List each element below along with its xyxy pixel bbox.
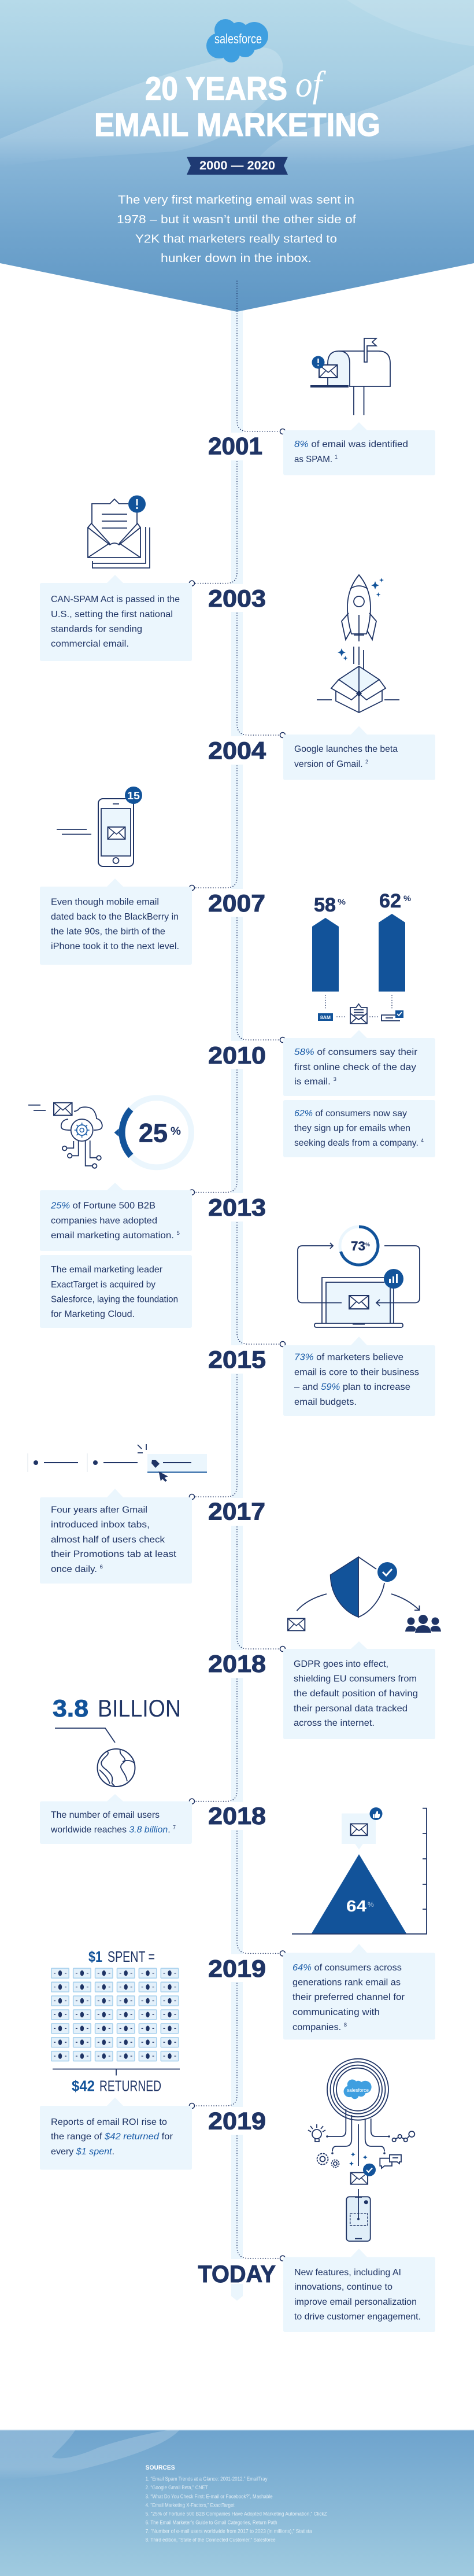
- callout 2001: [283, 422, 435, 475]
- callout 2018 users: [40, 1794, 192, 1844]
- connector 2001: [237, 281, 286, 434]
- stat: 3.8 billion with globe: [53, 1695, 181, 1787]
- intro text: [117, 193, 356, 265]
- callout 2018 GDPR: [283, 1641, 435, 1739]
- callout 2018 users: worldwide reaches 3.8 billion. 7: [50, 1824, 176, 1835]
- callout 2010 second: [283, 1100, 435, 1157]
- bar chart: 58% and 62%: 58: [314, 894, 336, 916]
- title: 20 YEARS: [145, 71, 287, 108]
- logo: salesforce cloud: [206, 19, 268, 62]
- callout 2019 preference: [283, 1944, 435, 2039]
- donut 25%: %: [171, 1125, 181, 1138]
- stat: 3.8 billion with globe: 3.8: [53, 1695, 88, 1722]
- callout 2019 ROI: Reports of email ROI rise to: [51, 2117, 167, 2127]
- callout today: New features, including AI: [294, 2268, 401, 2278]
- title: [94, 64, 380, 143]
- intro text: The very first marketing email was sent in: [118, 193, 354, 206]
- callout 2013: [40, 1183, 192, 1251]
- date ribbon: [187, 157, 288, 175]
- bar chart: 58% and 62%: 8AM: [320, 1015, 331, 1020]
- callout 2010: 58% of consumers say their: [294, 1047, 418, 1057]
- title: of: [295, 64, 327, 105]
- callout 2003: commercial email.: [51, 639, 129, 649]
- chart: $1 spent bills grid: [51, 1948, 180, 2095]
- logo: salesforce cloud: salesforce: [214, 31, 262, 46]
- year today: TODAY: [198, 2260, 276, 2287]
- intro text: hunker down in the inbox.: [161, 252, 312, 265]
- callout 2007: iPhone took it to the next level.: [51, 942, 179, 951]
- callout 2001: as SPAM. 1: [294, 454, 338, 464]
- callout 2013 second: The email marketing leader: [51, 1265, 163, 1275]
- callout today: improve email personalization: [294, 2297, 417, 2307]
- sources list: 7. “Number of e-mail users worldwide from 2017 to 2023 (in millions),” Statista: [146, 2528, 312, 2534]
- callout 2013 second: for Marketing Cloud.: [51, 1309, 135, 1319]
- callout 2010: is email. 3: [294, 1076, 336, 1087]
- callout 2018 GDPR: the default position of having: [294, 1689, 418, 1699]
- year 2004: 2004: [208, 737, 266, 764]
- date ribbon: 2000 — 2020: [199, 159, 275, 172]
- icon: GDPR shield: [288, 1557, 441, 1633]
- sources list: 2. “Google Gmail Beta,” CNET: [146, 2485, 208, 2490]
- donut 25%: [114, 1098, 191, 1167]
- callout 2019 preference: 64% of consumers across: [292, 1963, 402, 1973]
- sources list: 4. “Email Marketing X-Factors,” ExactTarget: [146, 2502, 235, 2508]
- sources list: [146, 2464, 327, 2542]
- icon: mailbox with alert envelope: [310, 338, 390, 415]
- callout 2017: once daily. 6: [51, 1564, 103, 1574]
- callout 2019 ROI: [40, 2097, 192, 2170]
- year 2003: 2003: [208, 585, 266, 612]
- intro text: Y2K that marketers really started to: [135, 232, 337, 245]
- callout 2004: Google launches the beta: [294, 744, 398, 754]
- icon: phone with new mail badge: 15: [127, 790, 140, 802]
- year 2017: 2017: [208, 1498, 265, 1525]
- callout 2015: [283, 1337, 435, 1416]
- chart: $1 spent bills grid: RETURNED: [99, 2077, 161, 2095]
- connector 2003: [190, 462, 237, 586]
- donut 25%: 25: [139, 1119, 168, 1147]
- icon: inbox tabs and cursor: [28, 1444, 207, 1482]
- year 2007: 2007: [208, 890, 265, 917]
- sources list: 8. Third edition, “State of the Connected Customer,” Salesforce: [146, 2537, 276, 2542]
- connector 2018 left: [190, 1679, 237, 1804]
- callout 2010 second: seeking deals from a company. 4: [294, 1138, 424, 1148]
- callout 2017: introduced inbox tabs,: [51, 1520, 150, 1530]
- title: EMAIL MARKETING: [94, 106, 380, 143]
- callout 2017: [40, 1489, 192, 1584]
- icon: AI personalization rings and channels: [308, 2059, 414, 2241]
- callout 2010: [283, 1030, 435, 1096]
- callout 2015: email budgets.: [294, 1397, 357, 1407]
- year 2013: 2013: [208, 1194, 266, 1221]
- callout 2013: 25% of Fortune 500 B2B: [50, 1201, 155, 1211]
- year 2019 left: 2019: [208, 2108, 266, 2134]
- connector 2017: [190, 1375, 237, 1499]
- callout 2001: 8% of email was identified: [294, 440, 408, 449]
- callout 2007: dated back to the BlackBerry in: [51, 912, 179, 922]
- callout 2019 preference: generations rank email as: [292, 1978, 401, 1987]
- year 2010: 2010: [208, 1042, 266, 1069]
- bar chart: 58% and 62%: 62: [379, 890, 401, 912]
- callout 2019 ROI: the range of $42 returned for: [51, 2132, 173, 2142]
- callout 2018 GDPR: their personal data tracked: [294, 1704, 408, 1714]
- footer panel: [0, 2430, 474, 2576]
- stat: 3.8 billion with globe: BILLION: [98, 1695, 181, 1722]
- bar chart: 58% and 62%: [312, 890, 412, 1024]
- callout 2018 GDPR: GDPR goes into effect,: [294, 1659, 388, 1669]
- connector 2004: [237, 613, 286, 738]
- header panel: [0, 0, 474, 312]
- connector 2007: [190, 766, 237, 891]
- callout 2017: their Promotions tab at least: [51, 1549, 177, 1559]
- callout today: innovations, continue to: [294, 2282, 392, 2292]
- callout 2013 second: ExactTarget is acquired by: [51, 1280, 155, 1290]
- chart: $1 spent bills grid: SPENT =: [108, 1948, 155, 1965]
- chart: 64% pyramid: %: [368, 1900, 374, 1909]
- year 2015: 2015: [208, 1346, 266, 1373]
- icon: 73% laptop loop: [298, 1227, 420, 1327]
- bar chart: 58% and 62%: %: [338, 897, 346, 906]
- callout 2013 second: Salesforce, laying the foundation: [51, 1294, 178, 1305]
- callout 2004: [283, 726, 435, 780]
- callout 2013: companies have adopted: [51, 1216, 157, 1226]
- sources list: 5. “25% of Fortune 500 B2B Companies Have Adopted Marketing Automation,” ClickZ: [146, 2511, 327, 2516]
- sources list: SOURCES: [146, 2464, 175, 2471]
- chart: $1 spent bills grid: $42: [72, 2077, 95, 2095]
- icon: rocket launching from box: [317, 575, 399, 713]
- callout 2013: email marketing automation. 5: [51, 1230, 180, 1241]
- icon: automation cloud and circuit: [28, 1102, 102, 1168]
- callout 2013 second: [40, 1255, 192, 1328]
- callout 2018 GDPR: across the internet.: [294, 1718, 375, 1728]
- timeline band: [231, 307, 243, 2301]
- callout today: to drive customer engagement.: [294, 2312, 421, 2322]
- bar chart: 58% and 62%: %: [403, 894, 412, 903]
- chart: $1 spent bills grid: $1: [88, 1948, 102, 1965]
- connector 2013: [190, 1070, 237, 1195]
- callout 2019 preference: companies. 8: [292, 2022, 347, 2032]
- connector 2015: [237, 1223, 286, 1346]
- callout 2019 preference: communicating with: [292, 2007, 380, 2017]
- connector 2018 right: [237, 1527, 286, 1652]
- connector today: [237, 2136, 286, 2261]
- callout 2003: standards for sending: [51, 625, 142, 634]
- icon: envelope with letter and alert: [88, 495, 150, 568]
- callout 2017: Four years after Gmail: [51, 1505, 147, 1515]
- callout 2007: Even though mobile email: [51, 898, 159, 907]
- callout 2018 users: The number of email users: [51, 1810, 160, 1820]
- chart: 64% pyramid: [292, 1807, 427, 1934]
- callout 2015: 73% of marketers believe: [294, 1352, 403, 1363]
- callout 2004: version of Gmail. 2: [294, 759, 368, 769]
- icon: phone with new mail badge: [57, 787, 142, 866]
- callout today: [283, 2249, 435, 2332]
- sources list: 6. The Email Marketer’s Guide to Gmail Categories, Return Path: [146, 2519, 277, 2525]
- year 2001: 2001: [208, 433, 262, 459]
- icon: AI personalization rings and channels: salesforce: [347, 2087, 369, 2094]
- icon: 73% laptop loop: %: [365, 1242, 370, 1248]
- callout 2019 ROI: every $1 spent.: [51, 2147, 114, 2157]
- chart: 64% pyramid: 64: [346, 1897, 366, 1915]
- sources list: 1. “Email Spam Trends at a Glance: 2001-2012,” EmailTray: [146, 2476, 268, 2482]
- connector 2019 right: [237, 1831, 286, 1956]
- connector 2010: [237, 918, 286, 1042]
- callout 2019 preference: their preferred channel for: [292, 1992, 405, 2002]
- callout 2010 second: 62% of consumers now say: [294, 1109, 407, 1119]
- icon: 73% laptop loop: 73: [351, 1239, 365, 1253]
- callout 2003: U.S., setting the first national: [51, 610, 173, 619]
- intro text: 1978 – but it wasn’t until the other side of: [117, 213, 356, 226]
- year 2018 right: 2018: [208, 1650, 266, 1677]
- year 2018 left: 2018: [208, 1802, 266, 1829]
- callout 2007: [40, 879, 192, 965]
- callout 2018 GDPR: shielding EU consumers from: [294, 1674, 417, 1684]
- callout 2003: CAN-SPAM Act is passed in the: [51, 595, 180, 604]
- callout 2010: first online check of the day: [294, 1062, 416, 1072]
- sources list: 3. “What Do You Check First: E-mail or Facebook?”, Mashable: [146, 2493, 273, 2499]
- callout 2010 second: they sign up for emails when: [294, 1123, 410, 1134]
- year 2019 right: 2019: [208, 1955, 266, 1982]
- callout 2003: [40, 575, 192, 661]
- callout 2007: the late 90s, the birth of the: [51, 927, 165, 937]
- callout 2015: email is core to their business: [294, 1367, 419, 1378]
- connector 2019 left: [190, 1983, 237, 2109]
- callout 2017: almost half of users check: [51, 1535, 165, 1545]
- callout 2015: – and 59% plan to increase: [294, 1382, 410, 1392]
